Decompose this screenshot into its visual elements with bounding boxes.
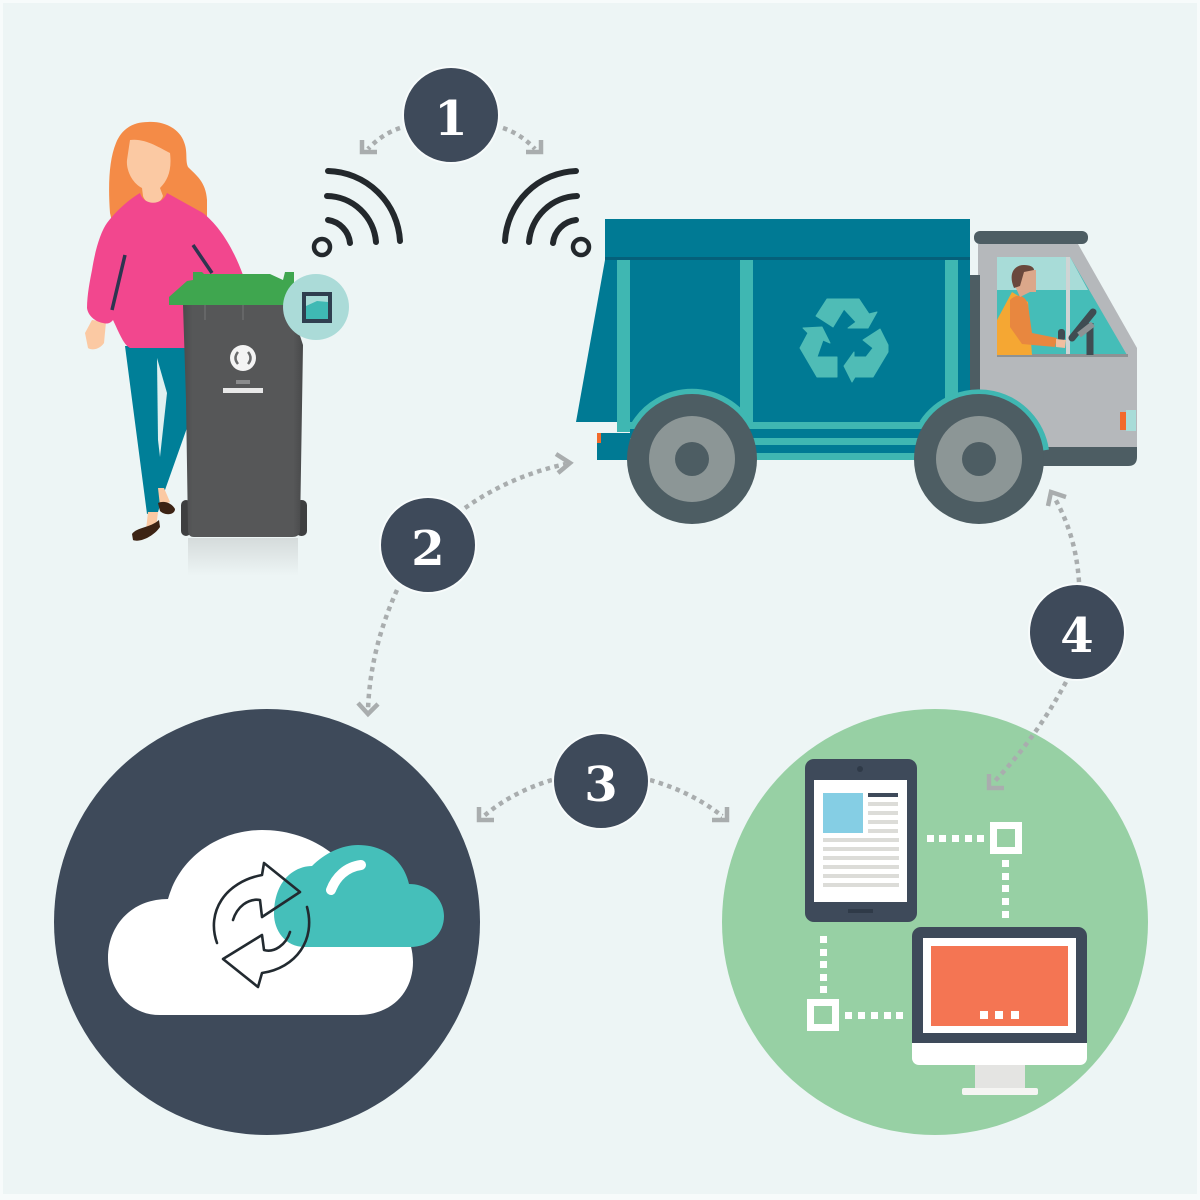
- ankles and shoes: [132, 488, 175, 541]
- chassis: [1040, 447, 1137, 466]
- truck cab: [978, 244, 1137, 447]
- truck top band: [605, 219, 970, 260]
- driver: [997, 265, 1066, 355]
- step badge 2: [380, 497, 476, 593]
- cab back wall: [970, 275, 980, 400]
- step badge 3: 3: [584, 757, 618, 813]
- step badge 4: 4: [1060, 608, 1094, 664]
- cab lights: [1120, 412, 1126, 430]
- icon: tablet: [805, 759, 917, 922]
- step badge 2: 2: [411, 521, 445, 577]
- bin body: [183, 305, 303, 537]
- bin wheels: [181, 500, 191, 536]
- illustration: woman with smart bin: [85, 122, 349, 576]
- woman's face and neck: [127, 140, 171, 204]
- icon: desktop monitor: [912, 927, 1087, 1095]
- bin label: [223, 380, 263, 393]
- body posts: [617, 260, 958, 432]
- steering wheel: [1058, 312, 1093, 355]
- bin lid: [169, 272, 294, 305]
- bin logo: [230, 345, 256, 371]
- truck body: [576, 260, 970, 425]
- rear wheel: [627, 392, 757, 524]
- step badge 1: [403, 67, 499, 163]
- dotted arrows: step 3: [479, 780, 727, 820]
- icon: white cloud: [108, 830, 413, 1015]
- woman's hand: [85, 320, 106, 349]
- lower rails: [597, 422, 930, 460]
- step badge 4: [1029, 584, 1125, 680]
- bin ribs: [205, 305, 243, 320]
- illustration: garbage truck: [576, 219, 1137, 524]
- bin shadow: [188, 538, 298, 576]
- cloud highlight: [331, 865, 361, 890]
- woman's sweater: [87, 193, 243, 348]
- dotted arrows: step 2: [358, 454, 570, 714]
- front wheel: [914, 392, 1046, 524]
- woman's legs: [125, 346, 190, 514]
- dotted arrows: step 4: [989, 492, 1079, 788]
- icon: teal cloud: [274, 845, 444, 947]
- icon: wifi signal left: [314, 171, 400, 255]
- dotted arrows: step 1: [362, 128, 541, 152]
- cab roof bar: [974, 231, 1088, 244]
- panel: devices circle: [722, 709, 1148, 1135]
- icon: sync arrows: [214, 863, 309, 987]
- step badge 3: [553, 733, 649, 829]
- network connectors: [807, 822, 1022, 1031]
- icon: wifi signal right: [505, 171, 589, 255]
- cab window: [997, 257, 1127, 355]
- gap between legs: [157, 358, 167, 457]
- sensor tag: [283, 274, 349, 340]
- step badge 1: 1: [434, 91, 468, 147]
- woman's hair: [109, 122, 207, 222]
- icon: recycling symbol: [800, 299, 888, 382]
- panel: cloud circle: [54, 709, 480, 1135]
- sweater folds: [112, 245, 212, 310]
